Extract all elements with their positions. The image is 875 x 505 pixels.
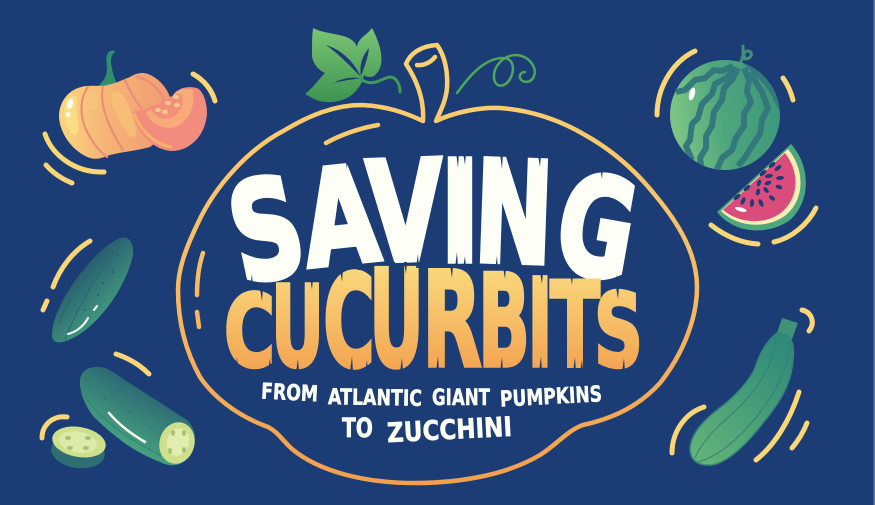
title: cucurbits: I (527, 253, 553, 395)
illustration: cut cucumber (80, 367, 199, 468)
title: cucurbits (224, 241, 643, 398)
subtitle: second line: ZUCCHINI (386, 412, 513, 449)
motion arcs: zucchini (672, 310, 812, 460)
title: cucurbits: U (369, 241, 424, 398)
illustration: whole cucumber (52, 237, 133, 342)
illustration: watermelon (670, 46, 782, 172)
title: cucurbits: B (478, 248, 530, 397)
illustration: watermelon slice (717, 144, 806, 230)
subtitle: first line: FROM (260, 380, 319, 407)
subtitle: second line: TO (342, 413, 373, 444)
subtitle: first line: ATLANTIC (328, 385, 422, 412)
title: saving: V (364, 131, 446, 294)
title: saving: I (440, 132, 480, 295)
right edge strip (874, 0, 875, 505)
subtitle: first line (260, 380, 603, 413)
title: cucurbits: R (422, 244, 482, 398)
subtitle: first line: PUMPKINS (499, 382, 603, 413)
illustration: cucumber slice (49, 423, 108, 472)
pumpkin outline frame (178, 45, 697, 483)
icon: leaves (305, 28, 400, 102)
subtitle: first line: GIANT (432, 386, 490, 411)
illustration: pumpkin with slice (59, 50, 207, 159)
motion arcs: pumpkin (45, 74, 215, 183)
motion arcs: whole cucumber (43, 241, 90, 310)
motion arcs: watermelon (657, 51, 816, 244)
title: cucurbits: U (271, 263, 324, 393)
title: cucurbits: T (550, 256, 600, 394)
title: saving: A (296, 138, 385, 298)
title: saving: S (216, 147, 317, 316)
title: cucurbits: C (224, 273, 275, 390)
title: saving (216, 131, 647, 316)
title: cucurbits: S (594, 272, 643, 391)
title: saving: N (472, 132, 556, 297)
subtitle: second line (342, 412, 513, 449)
title: saving: G (545, 145, 647, 314)
icon: curly vine (457, 55, 535, 93)
motion arcs: cut cucumber (42, 354, 149, 438)
title: cucurbits: C (323, 248, 375, 397)
illustration: zucchini (690, 318, 798, 465)
